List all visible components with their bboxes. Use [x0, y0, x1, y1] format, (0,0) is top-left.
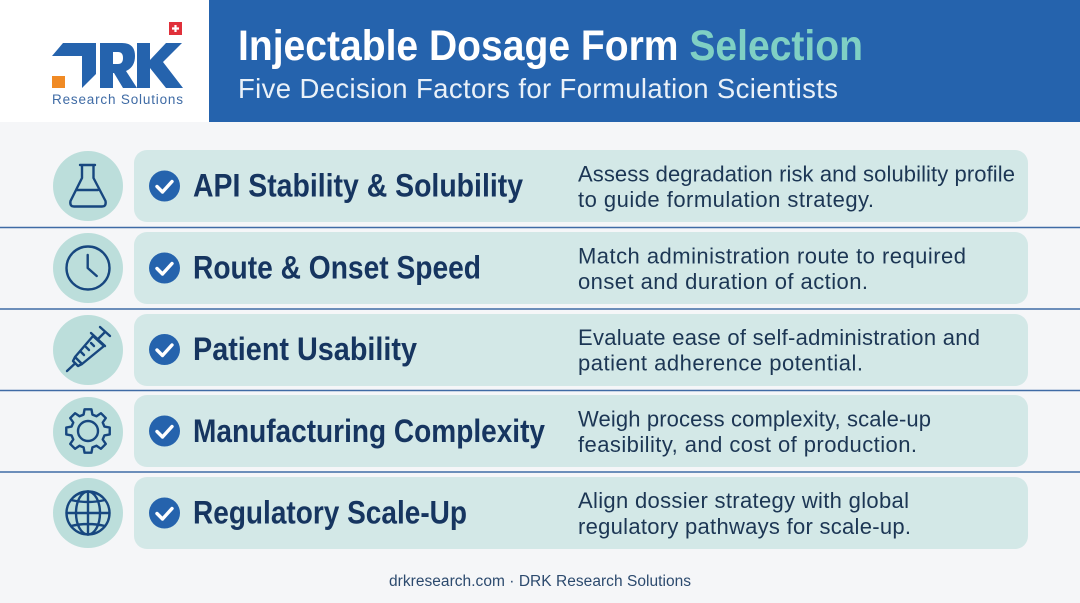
- description: Evaluate ease of self-administration and: [578, 325, 980, 350]
- description: Match administration route to required: [578, 244, 966, 268]
- description: patient adherence potential.: [578, 350, 863, 376]
- description: Weigh process complexity, scale-up: [578, 406, 931, 432]
- icon: syringe: [53, 315, 123, 385]
- row 1: API Stability & Solubility: [53, 150, 1028, 222]
- header banner: [209, 0, 1080, 122]
- row 4: Manufacturing Complexity: [53, 395, 1028, 467]
- description: [578, 488, 911, 539]
- description: [578, 162, 1015, 212]
- description: [578, 325, 980, 376]
- heading: API Stability & Solubility: [193, 168, 523, 204]
- row 5: Regulatory Scale-Up: [53, 477, 1028, 549]
- check badge: [149, 334, 180, 365]
- panel: [134, 150, 1028, 222]
- row 2: Route & Onset Speed: [53, 232, 1028, 304]
- description: Align dossier strategy with global: [578, 488, 909, 513]
- heading: Route & Onset Speed: [193, 250, 481, 286]
- description: [578, 244, 966, 294]
- logo: DRK mark: Research Solutions: [52, 92, 183, 107]
- logo: DRK mark: [52, 22, 183, 107]
- footer: drkresearch.com · DRK Research Solutions: [389, 573, 691, 590]
- icon: clock: [53, 233, 123, 303]
- heading: Manufacturing Complexity: [193, 413, 545, 449]
- check badge: [149, 416, 180, 446]
- panel: [134, 477, 1028, 549]
- icon: flask: [53, 151, 123, 221]
- check badge: [149, 498, 180, 528]
- check badge: [149, 170, 180, 202]
- row 3: Patient Usability: [53, 314, 1028, 386]
- logo panel: [0, 0, 209, 122]
- icon: globe: [53, 478, 123, 548]
- description: regulatory pathways for scale-up.: [578, 514, 911, 539]
- panel: [134, 314, 1028, 386]
- description: Assess degradation risk and solubility profile: [578, 162, 1015, 186]
- icon: gear: [53, 397, 123, 467]
- panel: [134, 232, 1028, 304]
- description: [578, 406, 931, 457]
- description: onset and duration of action.: [578, 269, 868, 294]
- heading: Patient Usability: [193, 331, 417, 367]
- heading: Regulatory Scale-Up: [193, 494, 467, 530]
- panel: [134, 395, 1028, 467]
- row dividers: [0, 228, 1080, 472]
- description: to guide formulation strategy.: [578, 187, 874, 212]
- subtitle: Five Decision Factors for Formulation Scientists: [238, 73, 838, 104]
- description: feasibility, and cost of production.: [578, 432, 917, 457]
- title: Injectable Dosage Form Selection: [238, 22, 863, 70]
- check badge: [149, 252, 180, 284]
